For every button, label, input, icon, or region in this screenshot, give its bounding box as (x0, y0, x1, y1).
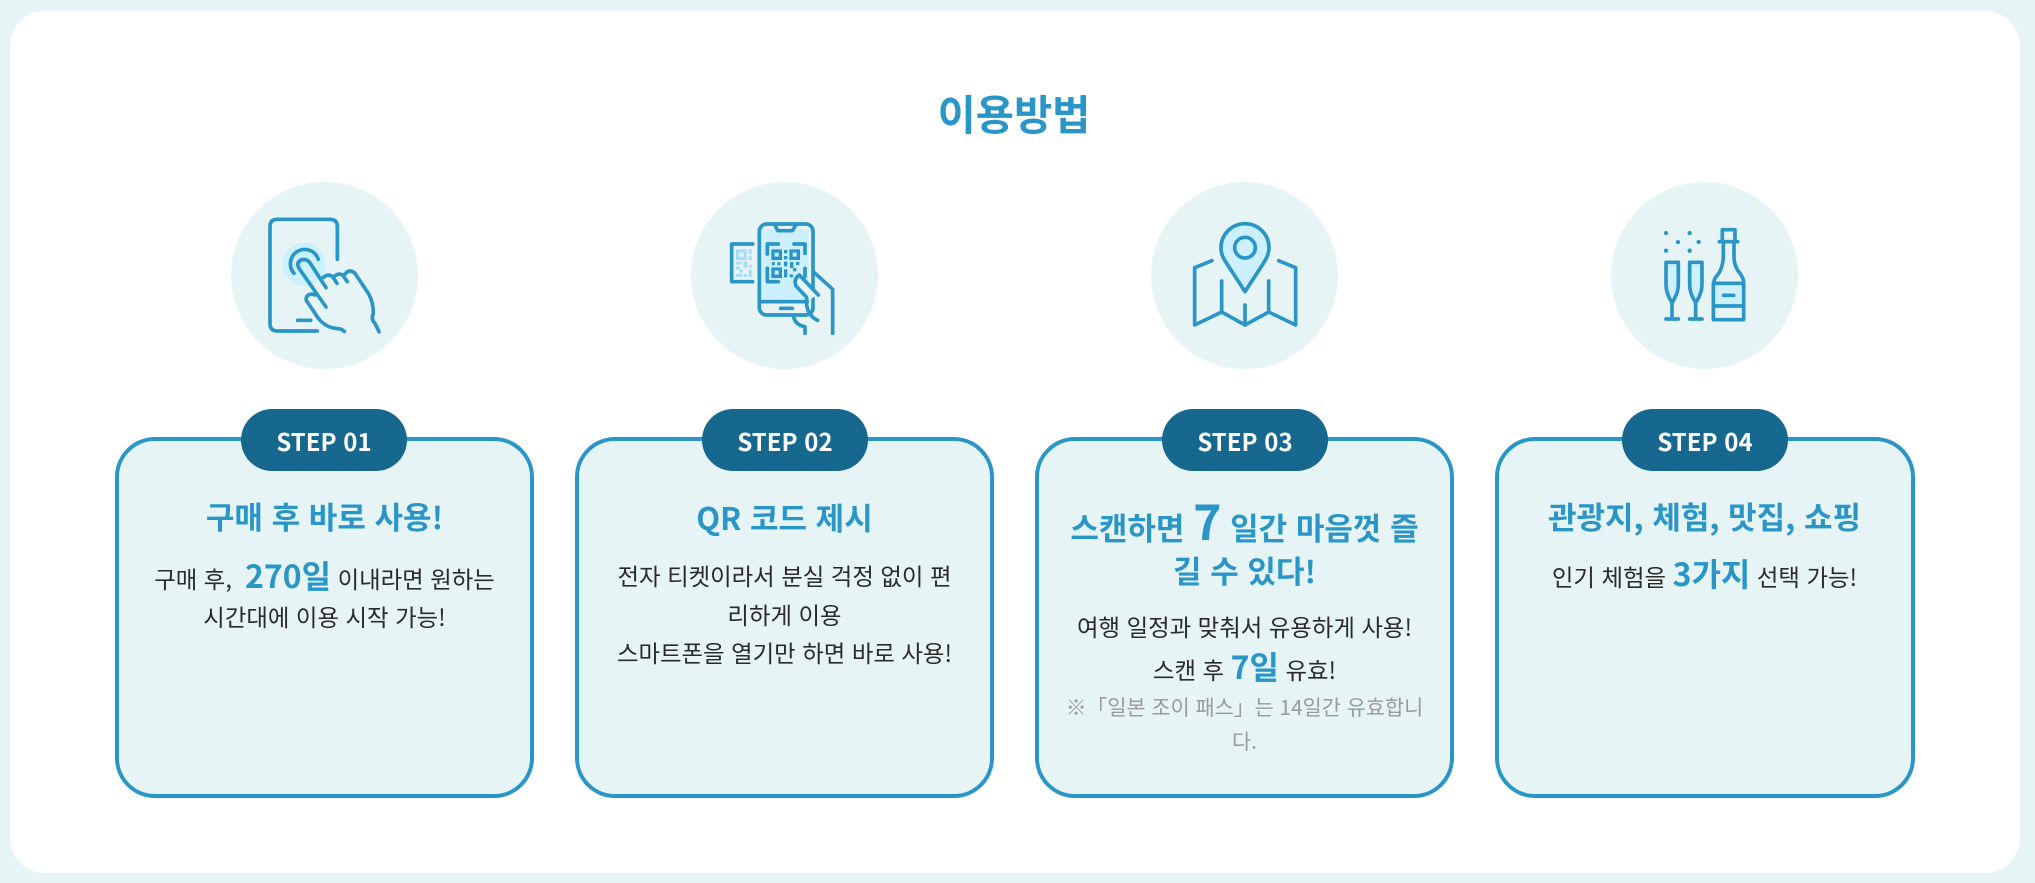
card: step 02 (575, 437, 994, 798)
panel: step 02 (575, 182, 994, 798)
step badge (241, 409, 407, 471)
icon circle: step 04 (1611, 182, 1798, 369)
card: step 03 (1035, 437, 1454, 798)
card body line 2: 리하게 이용 (727, 597, 842, 631)
icon: champagne bottle and glasses (1664, 228, 1746, 322)
icon circle: step 03 (1151, 182, 1338, 369)
note: ※「일본 조이 패스」는 14일간 유효합니 (1066, 691, 1423, 721)
icon: phone scanning QR code (730, 222, 834, 336)
card: step 04 (1495, 437, 1915, 798)
card body line 2: 스캔 후 7일 유효! (1153, 643, 1336, 689)
title: 이용방법 (938, 82, 1090, 142)
step badge: STEP 01 (276, 423, 372, 458)
icon: finger tapping tablet (268, 218, 381, 334)
step badge: STEP 04 (1657, 423, 1753, 458)
card body: 전자 티켓이라서 분실 걱정 없이 편 (617, 558, 952, 592)
card body line 2: 시간대에 이용 시작 가능! (203, 599, 446, 633)
icon circle: step 02 (691, 182, 878, 369)
card heading: 관광지, 체험, 맛집, 쇼핑 (1548, 493, 1861, 538)
step badge (702, 409, 868, 471)
card body: 여행 일정과 맞춰서 유용하게 사용! (1077, 609, 1412, 643)
card body: 인기 체험을 3가지 선택 가능! (1552, 550, 1857, 596)
card body line 3: 스마트폰을 열기만 하면 바로 사용! (617, 635, 952, 669)
card heading line 2: 길 수 있다! (1173, 547, 1316, 592)
icon circle: step 01 (231, 182, 418, 369)
note line 2: 다. (1232, 725, 1257, 755)
panel: step 04 (1495, 182, 1915, 798)
panel: step 03 (1035, 182, 1454, 798)
card: step 01 (115, 437, 534, 798)
card heading: 스캔하면 7 일간 마음껏 즐 (1070, 484, 1419, 554)
card heading: QR 코드 제시 (696, 494, 873, 539)
card body: 구매 후, 270일 이내라면 원하는 (154, 552, 495, 598)
step badge: STEP 02 (737, 423, 833, 458)
icon: map with location pin (1192, 222, 1298, 327)
panel: step 01 (115, 182, 534, 798)
step badge (1162, 409, 1328, 471)
card heading: 구매 후 바로 사용! (206, 493, 443, 538)
step badge: STEP 03 (1197, 423, 1293, 458)
step badge (1622, 409, 1788, 471)
